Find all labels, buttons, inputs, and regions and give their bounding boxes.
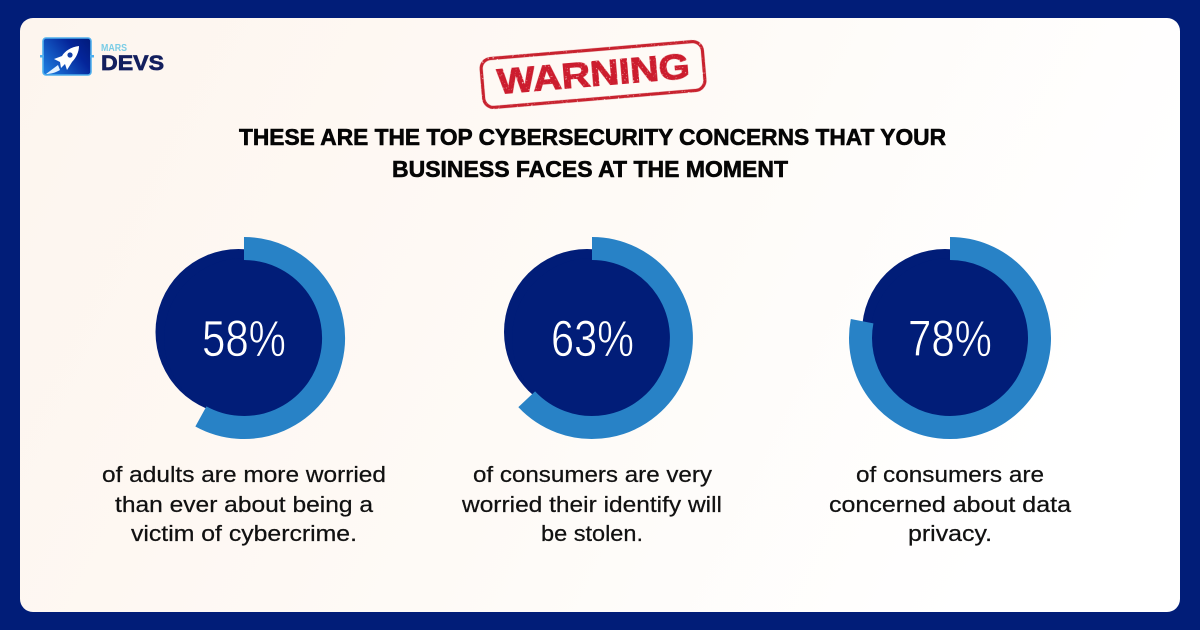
text: 58% caption: victim of cybercrime. [131, 521, 357, 546]
chart: 78% donut [861, 248, 1040, 428]
text: 78% caption [829, 462, 1072, 546]
text: 63% caption: be stolen. [541, 521, 643, 546]
value: 58%: 58% [202, 310, 286, 367]
text: 78% caption: privacy. [908, 521, 992, 546]
chart: 58% donut [156, 248, 334, 428]
text: 58% caption [102, 462, 386, 546]
text: 58% caption: than ever about being a [115, 492, 374, 517]
stamp: warning [480, 41, 706, 108]
text: 63% caption [461, 462, 722, 546]
text: 63% caption: of consumers are very [473, 462, 712, 487]
heading: THESE ARE THE TOP CYBERSECURITY CONCERNS THAT YOUR [239, 124, 946, 150]
chart: 63% donut [504, 248, 681, 427]
value: 63%: 63% [551, 310, 634, 367]
text: 78% caption: concerned about data [829, 492, 1072, 517]
logo: Mars Devs [40, 38, 164, 75]
icon: rocket badge [40, 38, 94, 75]
logo text: MARS: MARS [101, 42, 127, 54]
text: 78% caption: of consumers are [856, 462, 1044, 487]
text: 63% caption: worried their identify will [461, 492, 722, 517]
value: 78%: 78% [908, 310, 992, 367]
heading: BUSINESS FACES AT THE MOMENT [392, 156, 788, 182]
logo text: DEVS: DEVS [101, 52, 164, 75]
text: 58% caption: of adults are more worried [102, 462, 386, 487]
heading [239, 124, 946, 182]
stamp: warning: WARNING [496, 47, 691, 102]
